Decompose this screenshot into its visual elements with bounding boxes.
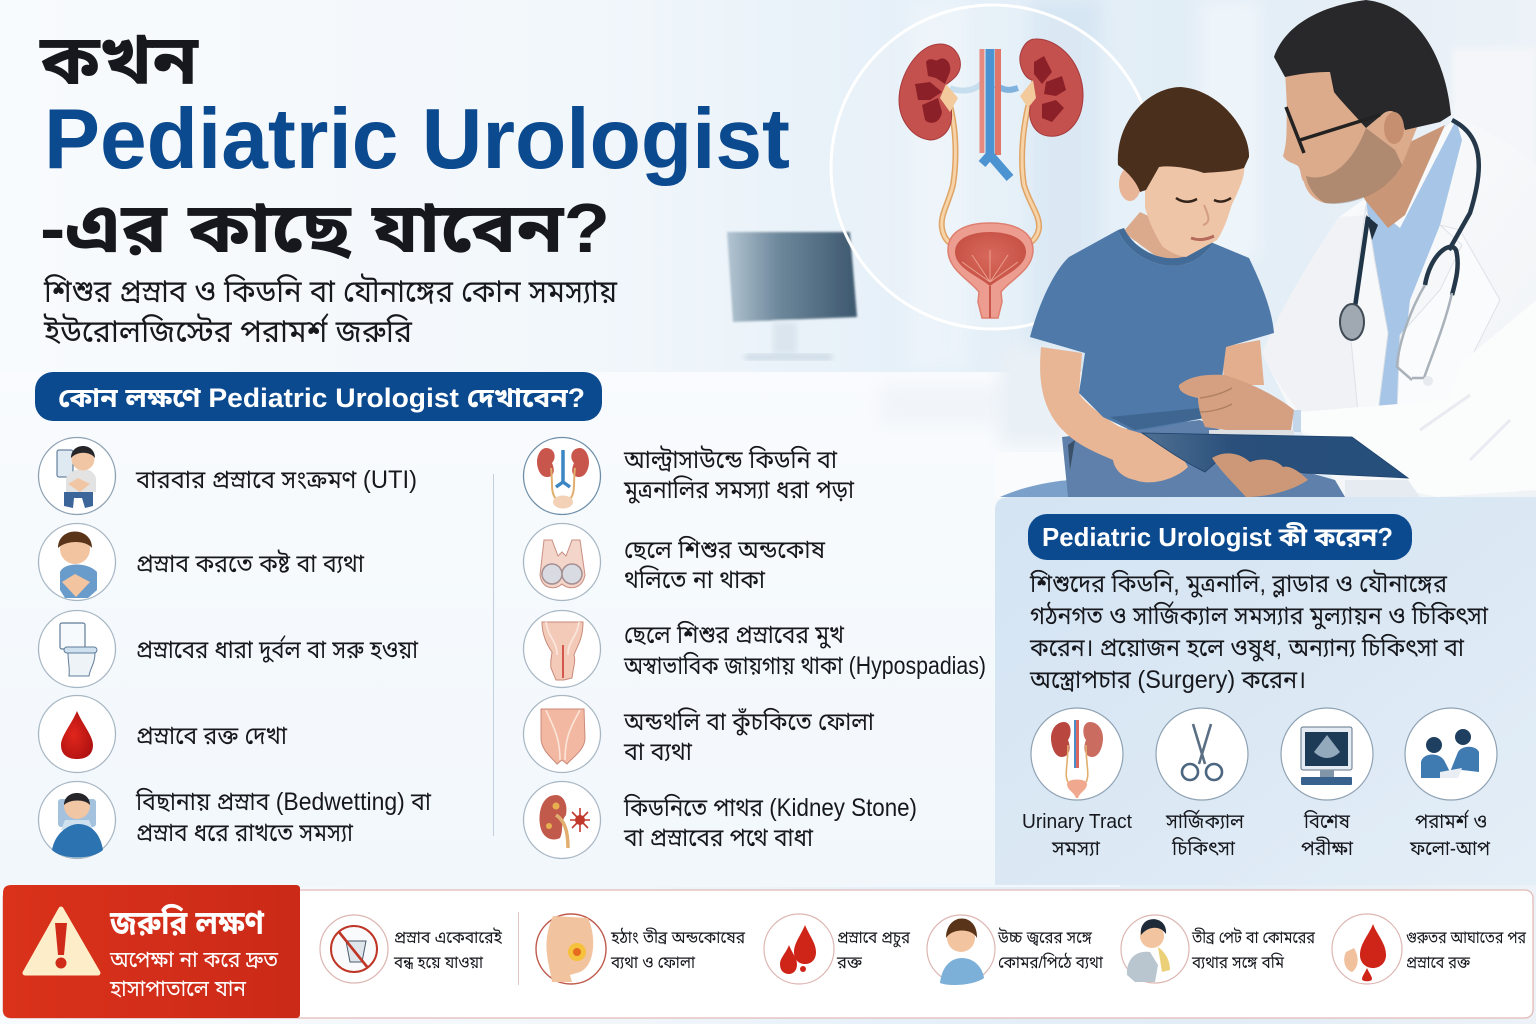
service: urinary tract: সমস্যা bbox=[1051, 838, 1101, 860]
service: special tests: পরীক্ষা bbox=[1301, 836, 1354, 860]
service: consultation and follow-up: ফলো-আপ bbox=[1409, 838, 1491, 860]
symptom: ultrasound finding: মুত্রনালির সমস্যা ধরা পড়া bbox=[623, 475, 854, 504]
emergency: urine stops: বন্ধ হয়ে যাওয়া bbox=[393, 953, 483, 972]
emergency heading block bbox=[3, 885, 300, 1018]
photo: doctor's body bbox=[1262, 0, 1536, 497]
emergency: heavy blood bbox=[764, 914, 911, 984]
symptom: scrotal swelling: অন্ডথলি বা কুঁচকিতে ফোলা bbox=[623, 707, 874, 736]
service: consultation and follow-up: পরামর্শ ও bbox=[1415, 808, 1487, 833]
emergency: heavy blood: প্রস্রাবে প্রচুর bbox=[837, 928, 911, 948]
symptom: weak stream bbox=[38, 610, 418, 688]
heading pill bbox=[1028, 514, 1412, 560]
symptom: pain while urinating bbox=[38, 524, 364, 600]
emergency: blood after injury bbox=[1332, 914, 1527, 984]
panel: symptoms background bbox=[0, 345, 1120, 887]
symptom: kidney stone bbox=[524, 782, 917, 858]
symptom: UTI: বারবার প্রস্রাবে সংক্রমণ (UTI) bbox=[135, 466, 417, 494]
panel: emergency signs bbox=[3, 885, 1533, 1018]
symptom: scrotal swelling bbox=[524, 696, 874, 772]
heading pill: symptoms: কোন লক্ষণে Pediatric Urologist দেখাবেন? bbox=[58, 383, 585, 413]
symptom: ultrasound finding bbox=[524, 438, 854, 514]
description text: শিশুদের কিডনি, মুত্রনালি, ব্লাডার ও যৌনাঙ্গের bbox=[1029, 569, 1448, 598]
photo: boy bbox=[1000, 87, 1345, 497]
title: Pediatric Urologist bbox=[44, 92, 790, 187]
emergency: fever with back pain bbox=[927, 915, 1103, 985]
symptom: ultrasound finding: আল্ট্রাসাউন্ডে কিডনি বা bbox=[623, 445, 837, 474]
subtitle bbox=[43, 274, 618, 349]
service: special tests: বিশেষ bbox=[1303, 809, 1350, 833]
illustration: urinary system in ring bbox=[831, 5, 1155, 329]
emergency: heavy blood: রক্ত bbox=[836, 953, 863, 972]
service: special tests bbox=[1281, 708, 1373, 860]
title: -এর কাছে যাবেন? bbox=[40, 189, 610, 267]
symptom: bedwetting: বিছানায় প্রস্রাব (Bedwetting) বা bbox=[135, 787, 431, 816]
heading pill: symptoms bbox=[35, 372, 602, 421]
service: urinary tract: Urinary Tract bbox=[1022, 811, 1132, 833]
symptom: hypospadias: অস্বাভাবিক জায়গায় থাকা (Hypospadias) bbox=[623, 651, 986, 680]
symptom: undescended testis: ছেলে শিশুর অন্ডকোষ bbox=[624, 535, 825, 564]
symptom: undescended testis: থলিতে না থাকা bbox=[624, 565, 765, 594]
emergency: urine stops bbox=[320, 915, 503, 983]
emergency: testicular pain bbox=[536, 914, 746, 984]
emergency: fever with back pain: উচ্চ জ্বরের সঙ্গে bbox=[997, 927, 1092, 947]
symptom: scrotal swelling: বা ব্যথা bbox=[623, 738, 692, 766]
emergency: abdominal pain with vomiting: তীব্র পেট বা কোমরের bbox=[1191, 927, 1316, 947]
emergency: urine stops: প্রস্রাব একেবারেই bbox=[394, 927, 503, 947]
service: surgery: সার্জিক্যাল bbox=[1165, 808, 1244, 833]
panel: what a pediatric urologist does bbox=[995, 497, 1536, 885]
symptom: hypospadias: ছেলে শিশুর প্রস্রাবের মুখ bbox=[624, 620, 844, 649]
symptom: blood in urine bbox=[38, 696, 287, 772]
description text: করেন। প্রয়োজন হলে ওষুধ, অন্যান্য চিকিৎসা বা bbox=[1029, 633, 1464, 662]
symptom: hypospadias bbox=[524, 610, 986, 688]
emergency: testicular pain: হঠাং তীব্র অন্ডকোষের bbox=[610, 926, 746, 947]
symptom: blood in urine: প্রস্রাবে রক্ত দেখা bbox=[136, 722, 287, 750]
symptom: kidney stone: বা প্রস্রাবের পথে বাধা bbox=[623, 824, 813, 852]
description text bbox=[1029, 569, 1488, 694]
title bbox=[39, 21, 790, 267]
service: consultation and follow-up bbox=[1405, 708, 1497, 860]
symptom: bedwetting: প্রস্রাব ধরে রাখতে সমস্যা bbox=[136, 819, 353, 847]
subtitle: শিশুর প্রস্রাব ও কিডনি বা যৌনাঙ্গের কোন সমস্যায় bbox=[43, 274, 618, 309]
emergency heading block: জরুরি লক্ষণ bbox=[109, 904, 264, 941]
symptom: undescended testis bbox=[524, 524, 825, 600]
service: urinary tract bbox=[1022, 708, 1132, 860]
column divider bbox=[493, 474, 494, 836]
symptom: weak stream: প্রস্রাবের ধারা দুর্বল বা সরু হওয়া bbox=[136, 634, 418, 664]
description text: গঠনগত ও সার্জিক্যাল সমস্যার মুল্যায়ন ও চিকিৎসা bbox=[1030, 600, 1488, 630]
heading pill: Pediatric Urologist কী করেন? bbox=[1042, 521, 1393, 552]
symptom: kidney stone: কিডনিতে পাথর (Kidney Stone) bbox=[623, 793, 917, 822]
symptom: pain while urinating: প্রস্রাব করতে কষ্ট বা ব্যথা bbox=[136, 549, 364, 578]
emergency: testicular pain: ব্যথা ও ফোলা bbox=[610, 953, 695, 972]
title: কখন bbox=[39, 21, 200, 99]
photo: doctor's arm, hands and clipboard bbox=[1142, 300, 1536, 497]
emergency: blood after injury: প্রস্রাবে রক্ত bbox=[1406, 953, 1471, 972]
service: surgery: চিকিৎসা bbox=[1171, 836, 1236, 860]
emergency: abdominal pain with vomiting: ব্যথার সঙ্গে বমি bbox=[1191, 952, 1285, 972]
divider bbox=[518, 912, 519, 985]
emergency heading block: হাসাপাতালে যান bbox=[109, 976, 247, 1001]
subtitle: ইউরোলজিস্টের পরামর্শ জরুরি bbox=[43, 313, 413, 349]
emergency: fever with back pain: কোমর/পিঠে ব্যথা bbox=[998, 951, 1103, 972]
emergency: abdominal pain with vomiting bbox=[1121, 915, 1316, 983]
description text: অস্ত্রোপচার (Surgery) করেন। bbox=[1029, 666, 1306, 694]
service: surgery bbox=[1156, 708, 1248, 860]
symptom: bedwetting bbox=[38, 782, 431, 858]
emergency heading block: অপেক্ষা না করে দ্রুত bbox=[109, 947, 278, 972]
symptom: UTI bbox=[38, 438, 417, 514]
